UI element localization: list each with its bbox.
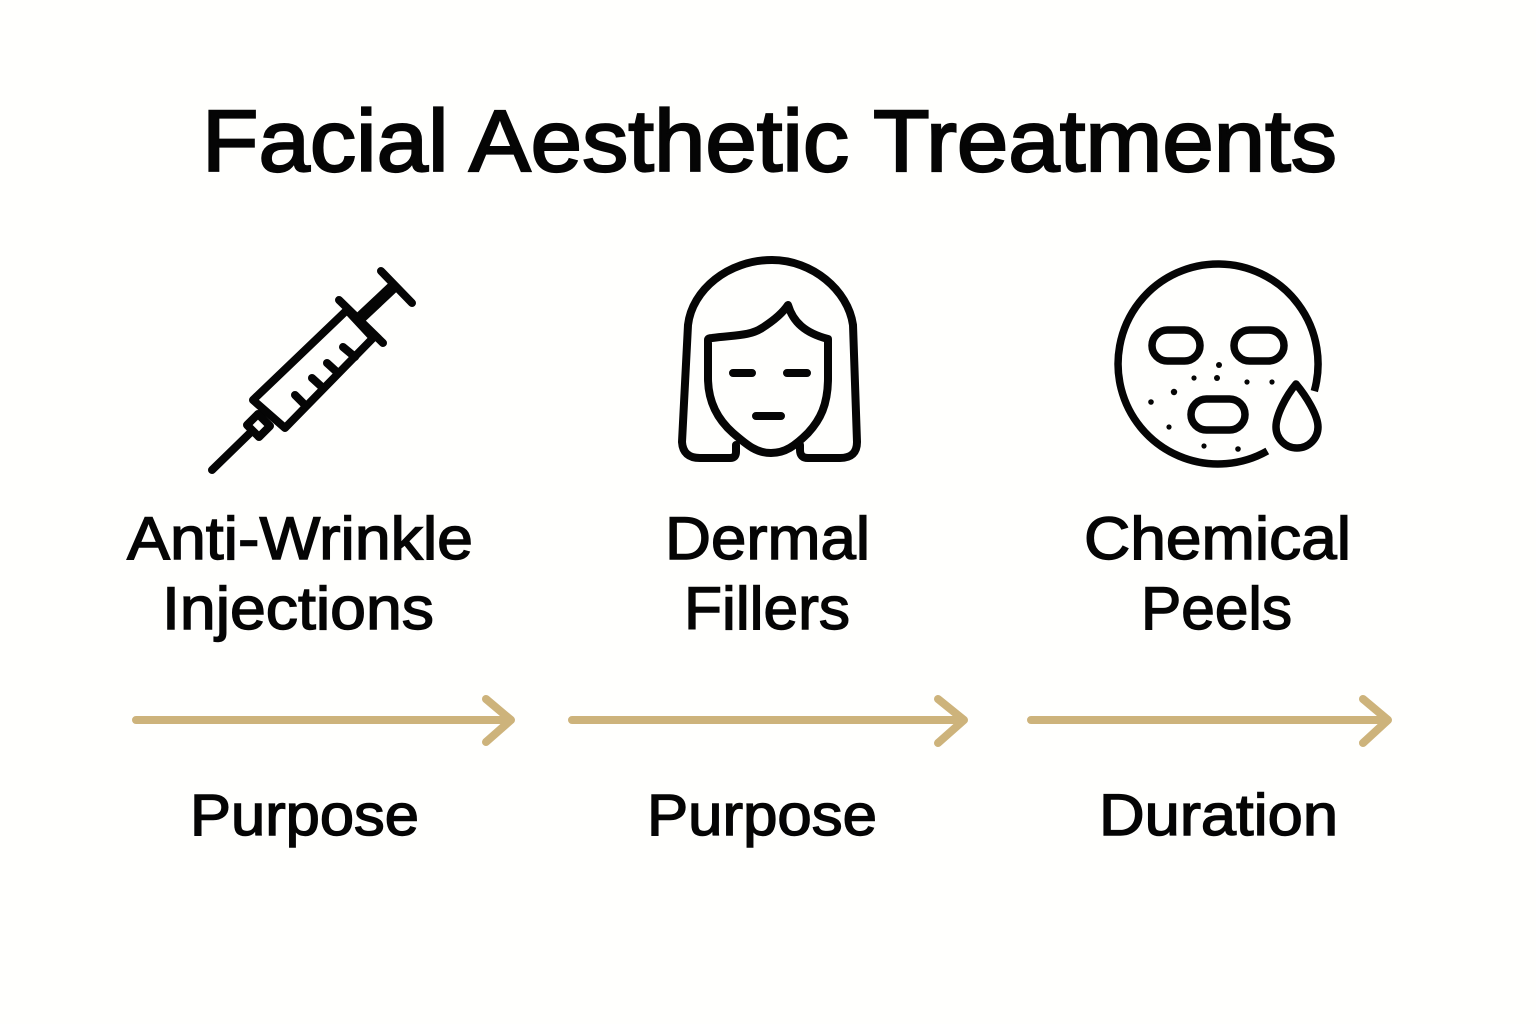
label: anti-wrinkle injections: Injections xyxy=(162,575,434,642)
label: dermal fillers xyxy=(665,505,870,642)
icon: syringe xyxy=(212,271,412,470)
label: chemical peels: Chemical xyxy=(1084,505,1351,572)
arrow 3 xyxy=(1031,699,1388,743)
label: chemical peels: Peels xyxy=(1141,575,1292,642)
caption: purpose 2: Purpose xyxy=(647,783,877,848)
title: Facial Aesthetic Treatments xyxy=(202,93,1337,190)
label: dermal fillers: Fillers xyxy=(684,575,850,642)
icon: facial peel mask xyxy=(1118,264,1318,464)
arrow 2 xyxy=(572,699,964,743)
label: anti-wrinkle injections: Anti-Wrinkle xyxy=(127,505,473,572)
label: anti-wrinkle injections xyxy=(127,505,473,642)
arrow 1 xyxy=(136,699,511,742)
label: dermal fillers: Dermal xyxy=(665,505,870,572)
icon: woman's face xyxy=(682,260,857,458)
caption: duration: Duration xyxy=(1099,783,1338,848)
label: chemical peels xyxy=(1084,505,1351,642)
caption: purpose 1: Purpose xyxy=(190,783,419,848)
